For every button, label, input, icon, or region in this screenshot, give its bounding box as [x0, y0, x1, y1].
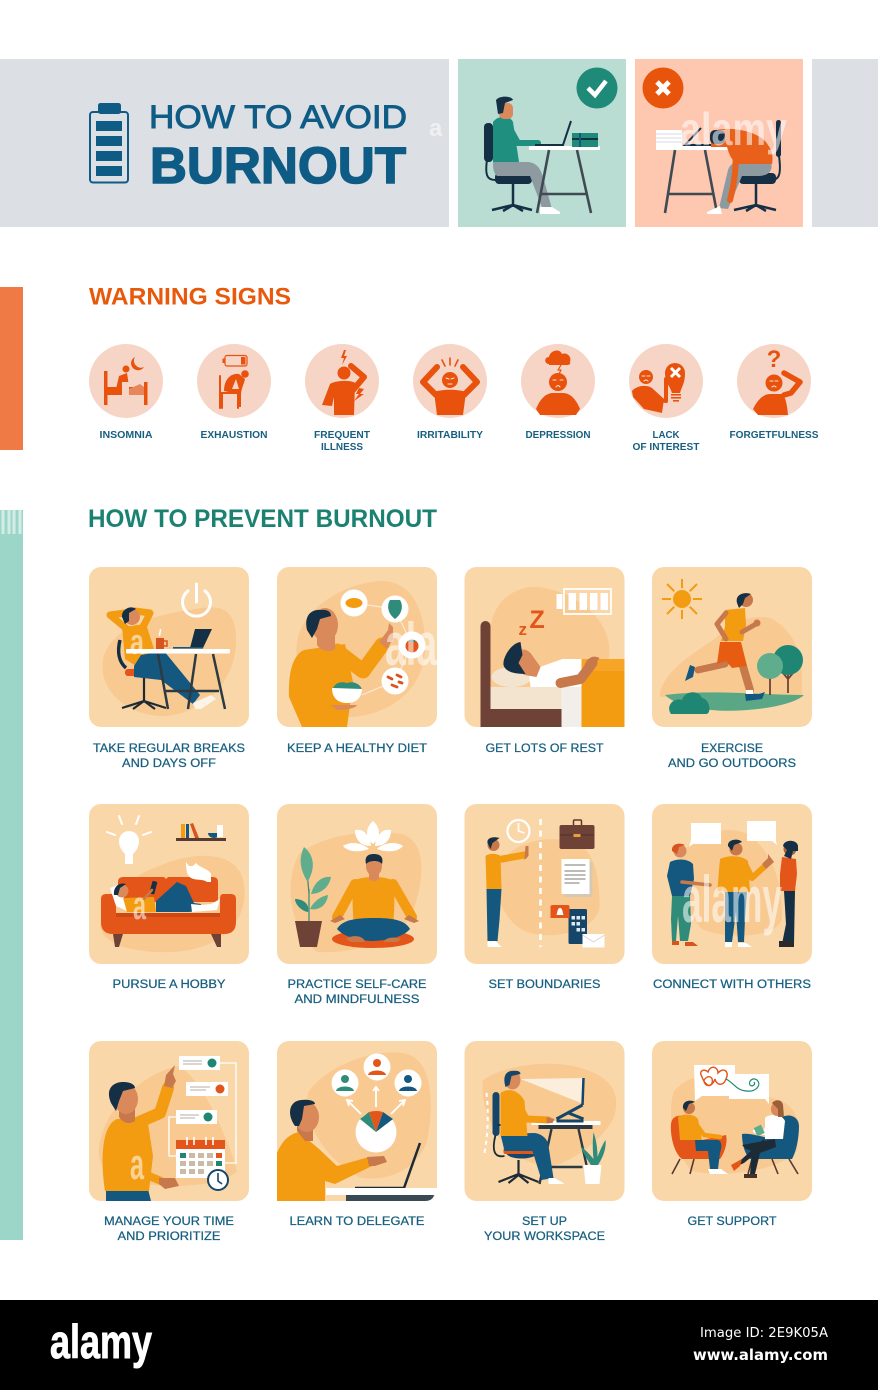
card: support [652, 1041, 812, 1228]
label: KEEP A HEALTHY DIET [287, 741, 428, 755]
label: DEPRESSION [526, 430, 590, 441]
person right [779, 841, 798, 947]
icon: lotus [343, 821, 403, 851]
icon: power [182, 584, 210, 616]
card: rest [464, 567, 624, 755]
pie [356, 1111, 396, 1152]
heading: how to prevent: HOW TO PREVENT BURNOUT [88, 505, 437, 533]
warning sign: irritability [413, 344, 487, 441]
title [149, 99, 407, 194]
label: EXERCISE [701, 741, 763, 755]
speech bubbles with scribbles [694, 1065, 769, 1104]
person left [667, 844, 710, 946]
card: connect: alamy [682, 862, 782, 936]
label: AND DAYS OFF [122, 756, 216, 770]
icon: cross badge [642, 68, 684, 108]
card: exercise [652, 567, 812, 770]
panel: healthy posture [458, 59, 626, 227]
side bar: warning signs [0, 287, 23, 450]
speech bubbles [689, 821, 777, 847]
label [104, 1214, 234, 1243]
label: INSOMNIA [100, 430, 153, 441]
label: LACK [652, 430, 680, 441]
website: www.alamy.com [693, 1346, 828, 1364]
warning sign: exhaustion [197, 344, 271, 441]
icon: check badge [576, 68, 618, 108]
label: TAKE REGULAR BREAKS [93, 741, 245, 755]
card: hobby: a [133, 884, 146, 928]
desk and laptop [126, 629, 230, 709]
icon: battery [90, 103, 128, 182]
left armchair [671, 1116, 727, 1174]
connectors [169, 1063, 236, 1163]
label: AND GO OUTDOORS [668, 756, 796, 770]
chair [119, 640, 166, 709]
label: OF INTEREST [632, 442, 700, 453]
desk with laptop [529, 121, 600, 213]
title: BURNOUT [150, 137, 406, 194]
warning sign: lack of interest [629, 344, 703, 453]
briefcase [560, 820, 594, 849]
phone with notification [550, 905, 604, 948]
label [288, 977, 426, 1006]
warning sign: frequent illness [305, 344, 379, 453]
plant [295, 847, 331, 947]
warning sign: depression [521, 344, 595, 441]
right armchair [742, 1115, 799, 1174]
label [632, 430, 700, 453]
sleep letters: Z [530, 606, 545, 634]
card: connect [652, 804, 812, 991]
icon: full battery [556, 589, 611, 614]
client [678, 1101, 728, 1174]
card: take regular breaks [89, 567, 249, 770]
desk [532, 1121, 600, 1184]
label [668, 741, 796, 770]
document [562, 859, 592, 897]
label: GET LOTS OF REST [486, 741, 604, 755]
laptop on stand [556, 1078, 584, 1121]
task cards [176, 1056, 228, 1124]
card: take regular breaks: a [130, 621, 145, 662]
label: PRACTICE SELF-CARE [288, 977, 426, 991]
card: hobby [89, 804, 249, 991]
desk with papers and laptop [656, 128, 728, 213]
label [484, 1214, 605, 1243]
footer bar [0, 1300, 878, 1390]
icon: light bulb [107, 816, 151, 864]
shelf [176, 823, 226, 841]
icon: clock [508, 820, 530, 842]
label [314, 430, 371, 453]
label: FREQUENT [314, 430, 371, 441]
plant [580, 1132, 606, 1184]
person at desk [500, 1070, 564, 1184]
person middle [719, 840, 774, 947]
cat [186, 862, 211, 882]
calendar [176, 1137, 228, 1190]
runner [685, 593, 765, 701]
title: HOW TO AVOID [149, 99, 407, 135]
laptop and desk [326, 1143, 437, 1201]
sofa [101, 877, 236, 947]
label: EXHAUSTION [200, 430, 268, 441]
label: YOUR WORKSPACE [484, 1229, 605, 1243]
therapist [731, 1100, 785, 1178]
label: AND PRIORITIZE [118, 1229, 220, 1243]
heading: warning signs: WARNING SIGNS [89, 284, 291, 310]
card: boundaries [464, 804, 624, 991]
header band: a [429, 115, 443, 142]
label: LEARN TO DELEGATE [290, 1214, 424, 1228]
warning sign: forgetfulness: ? [767, 346, 781, 373]
sleeping person [503, 642, 600, 687]
person meditating [330, 854, 419, 948]
person stop gesture [486, 837, 528, 947]
person slumped over desk: alamy [680, 103, 787, 155]
bed [480, 621, 624, 727]
person pointing [103, 1065, 179, 1201]
warning sign: insomnia [89, 344, 163, 441]
label: MANAGE YOUR TIME [104, 1214, 234, 1228]
image id: Image ID: 2E9K05A [700, 1325, 829, 1341]
label: FORGETFULNESS [730, 430, 819, 441]
card: healthy diet [277, 567, 437, 755]
park [665, 645, 804, 714]
card: healthy diet: ala [385, 611, 437, 678]
person [277, 1100, 387, 1201]
label: CONNECT WITH OTHERS [653, 977, 811, 991]
person relaxing [110, 607, 216, 709]
food icons [340, 590, 426, 695]
dashed posture line [484, 1093, 488, 1153]
label: GET SUPPORT [688, 1214, 777, 1228]
card: self-care [277, 804, 437, 1006]
arrows [347, 1087, 405, 1114]
person working at desk [484, 97, 560, 214]
dashed boundary [539, 819, 542, 947]
label: AND MINDFULNESS [294, 992, 420, 1006]
person with bowl [289, 608, 393, 727]
icon: sun [662, 579, 702, 619]
label: SET UP [522, 1214, 567, 1228]
label: PURSUE A HOBBY [112, 977, 226, 991]
label: SET BOUNDARIES [488, 977, 600, 991]
side bar: prevention [0, 510, 23, 1240]
line of sight [520, 1078, 584, 1104]
card: manage time: a [130, 1140, 144, 1189]
label: IRRITABILITY [417, 430, 483, 441]
card: manage time [89, 1041, 249, 1243]
logo: alamy [50, 1315, 152, 1368]
label [93, 741, 245, 770]
team circles [332, 1054, 422, 1096]
person reading [110, 881, 220, 912]
card: delegate [277, 1041, 437, 1228]
header band [0, 59, 878, 227]
person slumped over desk [680, 103, 787, 214]
label: ILLNESS [321, 442, 363, 453]
sleep letters [518, 606, 545, 639]
chair [492, 1092, 538, 1183]
panel: burned out posture [635, 59, 803, 227]
sleep letters: z [518, 620, 527, 639]
warning sign: forgetfulness [730, 344, 819, 441]
card: workspace [464, 1041, 624, 1243]
